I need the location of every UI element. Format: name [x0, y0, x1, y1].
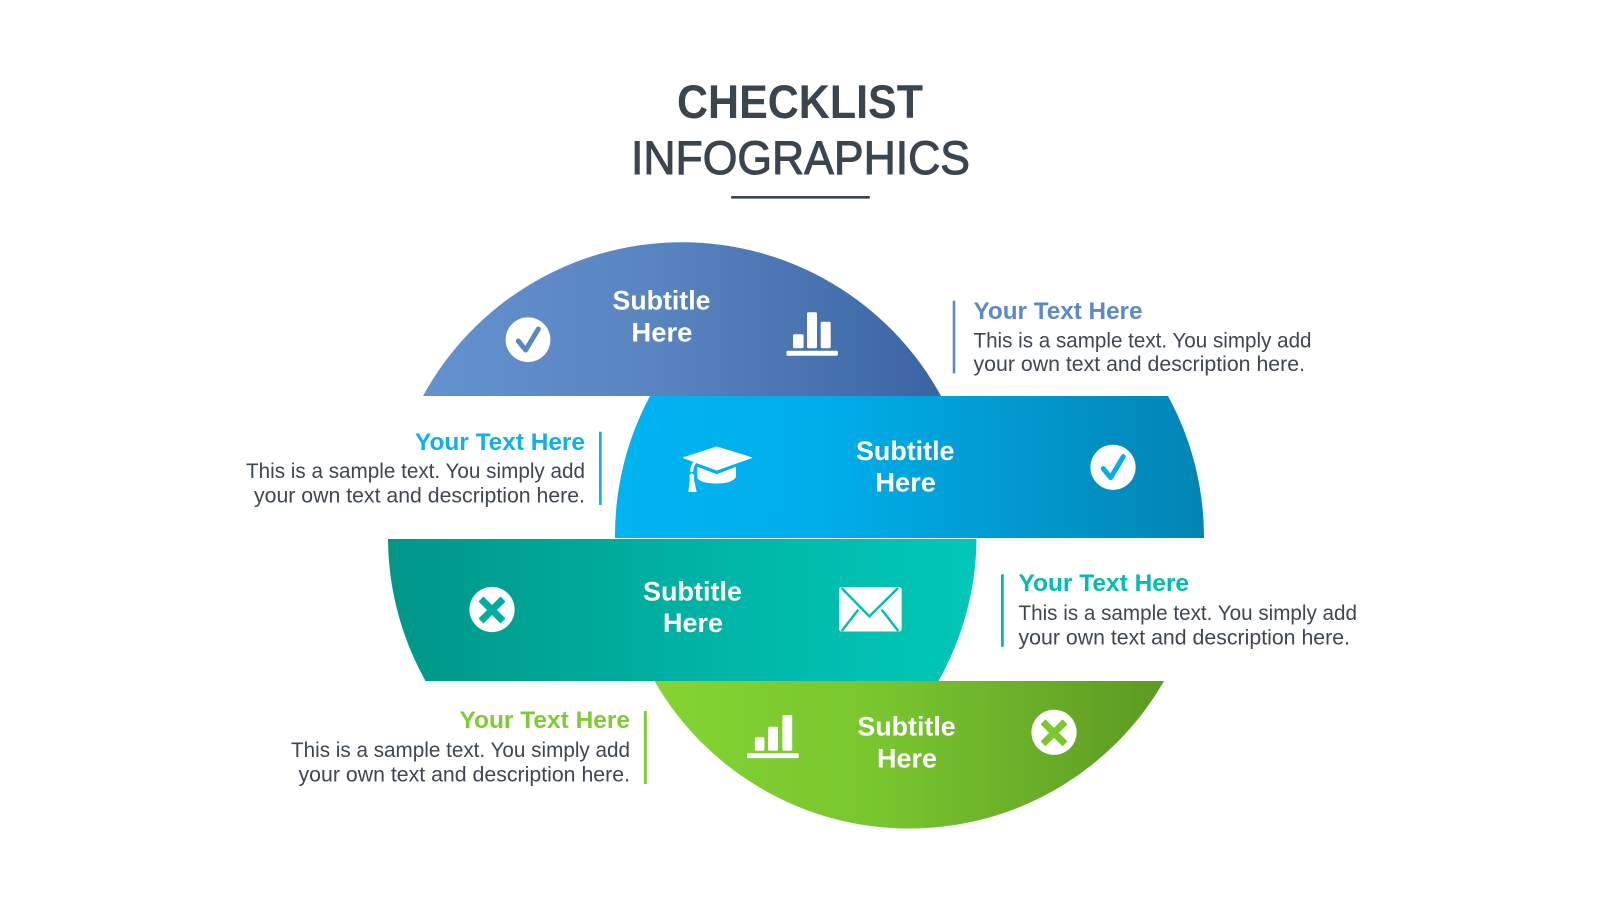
- subtitle band 3: Here: [663, 608, 723, 638]
- callout 1: [953, 298, 1312, 376]
- icon: graduation cap: [683, 447, 752, 492]
- icon: bar chart green: [747, 715, 799, 758]
- callout 4: [291, 707, 647, 786]
- callout 3: your own text and description here.: [1018, 626, 1350, 649]
- icon: x circle green: [1031, 710, 1077, 755]
- panel: band 3 teal: [388, 539, 976, 681]
- callout 3: This is a sample text. You simply add: [1018, 602, 1357, 625]
- subtitle band 2: Subtitle: [856, 436, 954, 466]
- panel: band 1 blue: [423, 242, 941, 396]
- subtitle band 1: [612, 285, 710, 348]
- subtitle band 2: Here: [875, 468, 936, 498]
- callout 2: your own text and description here.: [254, 484, 585, 507]
- callout 4: your own text and description here.: [298, 763, 630, 786]
- callout 1: your own text and description here.: [974, 353, 1305, 376]
- callout 2: This is a sample text. You simply add: [246, 460, 585, 483]
- callout 4: Your Text Here: [460, 707, 630, 734]
- title: CHECKLIST: [677, 75, 923, 128]
- callout 1: This is a sample text. You simply add: [974, 330, 1312, 352]
- callout 1: Your Text Here: [974, 298, 1142, 325]
- subtitle band 4: Subtitle: [857, 711, 956, 741]
- callout 3: [1001, 570, 1357, 649]
- panel: band 2 cyan: [615, 396, 1204, 538]
- callout 3: Your Text Here: [1018, 570, 1189, 597]
- title: INFOGRAPHICS: [631, 131, 970, 184]
- subtitle band 4: Here: [877, 743, 937, 773]
- title: [631, 75, 970, 199]
- icon: bar chart blue: [786, 312, 838, 356]
- panel: band 4 green: [654, 681, 1164, 829]
- subtitle band 2: [856, 436, 954, 498]
- callout 2: Your Text Here: [415, 429, 585, 456]
- subtitle band 1: Here: [631, 318, 692, 348]
- subtitle band 1: Subtitle: [612, 285, 710, 315]
- callout 2: [246, 429, 602, 507]
- icon: check circle blue: [506, 317, 550, 362]
- subtitle band 3: Subtitle: [643, 577, 742, 607]
- callout 4: This is a sample text. You simply add: [291, 739, 630, 762]
- subtitle band 4: [857, 711, 956, 773]
- icon: envelope: [839, 587, 902, 632]
- subtitle band 3: [643, 577, 742, 638]
- icon: check circle cyan: [1090, 445, 1136, 490]
- icon: x circle teal: [469, 587, 515, 632]
